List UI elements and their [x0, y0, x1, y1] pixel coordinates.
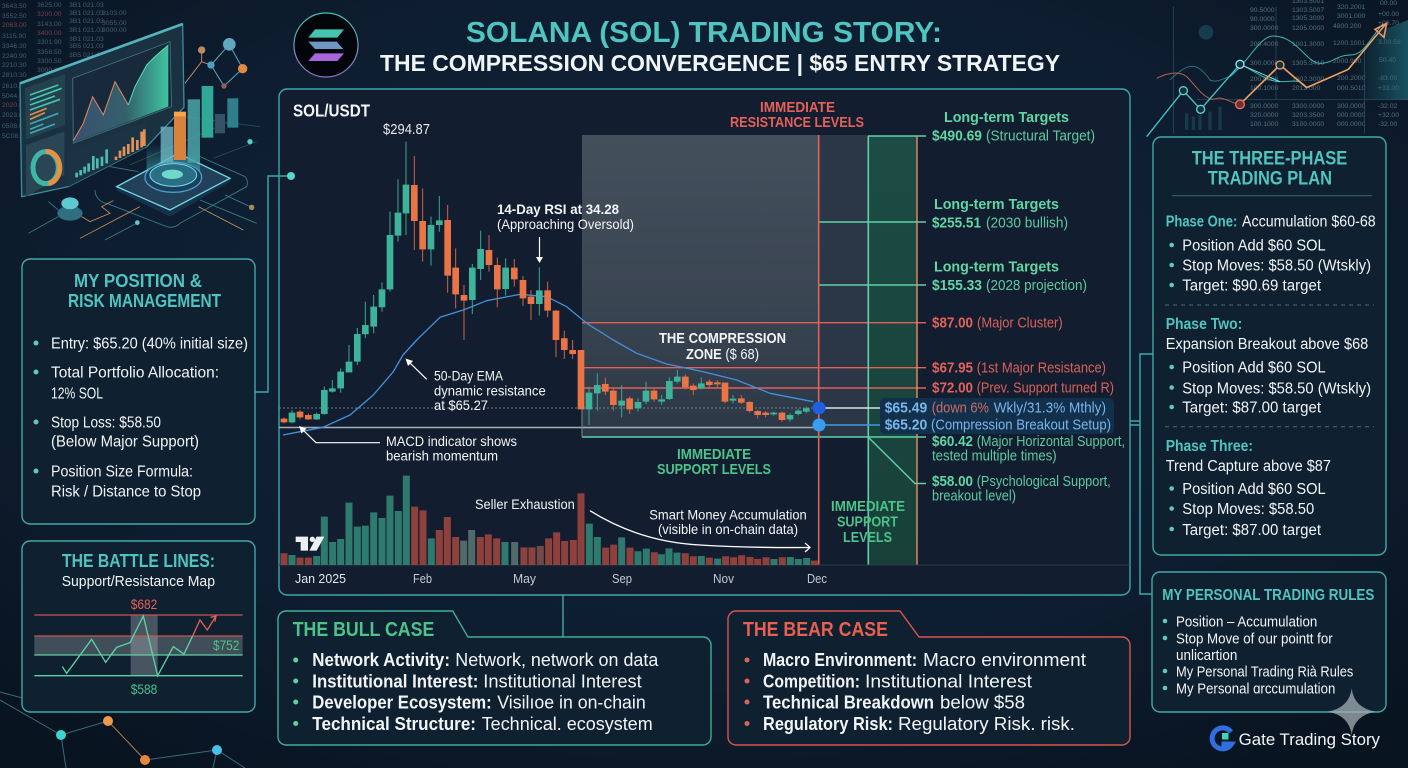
heading: THE THREE-PHASE	[1192, 147, 1347, 169]
long-term target labels: (2028 projection)	[986, 277, 1087, 294]
heading	[1192, 147, 1347, 189]
decorative market numbers, top left: 3300.50	[37, 58, 62, 65]
time axis labels: Sep	[612, 572, 632, 586]
immediate support label, column: LEVELS	[843, 529, 892, 546]
decorative market numbers, top left: 3301.90	[37, 39, 62, 46]
logo: TradingView mark	[296, 537, 324, 551]
decorative market numbers, top left: 3B1 021.03	[69, 18, 104, 25]
panel: the battle lines	[22, 541, 255, 712]
long-term target labels: $155.33	[932, 277, 982, 294]
position list: Entry: $65.20 (40% initial size)	[51, 336, 248, 352]
support level labels	[932, 433, 1125, 505]
decorative market numbers, top left: 5C08.00	[2, 133, 28, 140]
resistance level labels: (Major Cluster)	[977, 315, 1063, 332]
decorative market numbers, top right: +32.00	[1378, 112, 1399, 119]
position list: Total Portfolio Allocation:	[51, 364, 219, 382]
smart money annotation with arrow: (visible in on-chain data)	[658, 521, 798, 537]
decorative market numbers, top left: 3B1 021.03	[69, 2, 104, 9]
phase two	[1166, 316, 1371, 417]
long-term target labels: $255.51	[932, 215, 981, 232]
phase two: Target: $87.00 target	[1182, 400, 1322, 417]
decorative market numbers, top right: 3001.000	[1337, 13, 1366, 20]
panel: the bull case	[278, 611, 711, 745]
decorative market numbers, top left: 3000.00	[37, 67, 62, 74]
phase three: Position Add $60 SOL	[1182, 481, 1326, 498]
decorative market numbers, top left: 2023.00	[2, 112, 27, 119]
position list: Position Size Formula:	[51, 464, 193, 480]
heading: THE BEAR CASE	[743, 619, 888, 641]
current price labels: Wkly/31.3% Mthly)	[994, 399, 1106, 416]
support level labels: (Psychological Support,	[977, 473, 1111, 490]
heading: THE BULL CASE	[293, 619, 434, 641]
decorative market numbers, top left: 2610.00	[2, 83, 27, 90]
decorative market numbers, top right: 000.0000	[1337, 121, 1366, 128]
bull list: Visilıoe in on-chain	[497, 692, 646, 712]
heading: THE BATTLE LINES:	[62, 551, 215, 571]
decorative market numbers, top right: 3100.0000	[1292, 121, 1324, 128]
phase one	[1166, 214, 1376, 295]
bull list: Institutional Interest:	[312, 671, 478, 691]
decorative market numbers, top right: 300.0000	[1250, 103, 1279, 110]
immediate support label, zone: IMMEDIATE	[677, 446, 751, 463]
immediate resistance label: IMMEDIATE	[760, 99, 835, 116]
price labels	[131, 597, 239, 697]
decorative market numbers, top left: 2020.00	[2, 102, 27, 109]
decorative market numbers, top right: +33.00	[1378, 85, 1399, 92]
decorative market numbers, top left: 2210.30	[2, 62, 27, 69]
title	[380, 17, 1060, 76]
decorative market numbers, top right: 200.4000	[1250, 41, 1279, 48]
rules list: Stop Move of our pointt for	[1176, 631, 1333, 647]
time axis labels: Dec	[807, 572, 827, 586]
connector node	[287, 172, 295, 180]
phase three: Trend Capture above $87	[1166, 458, 1331, 475]
decorative market numbers, top left: 3358.50	[37, 49, 62, 56]
decorative market numbers, top right	[1250, 0, 1401, 128]
decorative market numbers, top left: 3B1 021.03	[69, 10, 104, 17]
rules list: My Personal ɑrccumulation	[1176, 681, 1335, 697]
long-term target labels: Long-term Targets	[944, 109, 1069, 126]
phase three: Phase Three:	[1166, 438, 1253, 455]
position list: Stop Loss: $58.50	[51, 414, 161, 432]
time axis labels	[295, 572, 827, 586]
phase one: Phase One:	[1166, 214, 1237, 231]
decorative market numbers, top right: 320.2001	[1337, 4, 1366, 11]
panel: my position and risk management	[22, 259, 255, 524]
seller exhaustion label: Seller Exhaustion	[475, 496, 575, 512]
panel: my personal trading rules	[1152, 572, 1386, 712]
support level labels: (Major Horizontal Support,	[977, 433, 1125, 450]
current price labels: $65.49	[885, 399, 927, 416]
decorative market numbers, top left: 3400.00	[37, 30, 62, 37]
compression zone label	[659, 331, 786, 363]
resistance level labels: (Prev. Support turned R)	[977, 380, 1114, 397]
bear list: below $58	[940, 692, 1025, 712]
decorative market numbers, top right: 3203.3500	[1292, 112, 1324, 119]
decorative market numbers, top left: 3200.00	[37, 11, 62, 18]
MACD annotation with arrow: bearish momentum	[386, 448, 498, 464]
decorative market numbers, top right: -32.00	[1378, 121, 1397, 128]
heading: RISK MANAGEMENT	[68, 290, 222, 311]
smart money annotation with arrow: Smart Money Accumulation	[649, 506, 807, 522]
heading: Support/Resistance Map	[62, 573, 215, 590]
decorative market numbers, top right: 2012.000	[1292, 85, 1321, 92]
position list	[34, 336, 248, 500]
price markers	[812, 402, 826, 432]
time axis labels: Feb	[413, 572, 432, 586]
candlesticks	[284, 142, 806, 425]
decorative market numbers, top left: 3552.50	[2, 13, 27, 20]
bull list: Network Activity:	[312, 650, 450, 670]
RSI annotation	[497, 201, 634, 263]
title: SOLANA (SOL) TRADING STORY:	[466, 17, 942, 49]
high price label: $294.87	[383, 121, 430, 138]
long-term target labels: (Structural Target)	[986, 128, 1095, 145]
MACD annotation with arrow: MACD indicator shows	[386, 433, 517, 449]
phase one: Target: $90.69 target	[1182, 278, 1322, 295]
long-term target labels: Long-term Targets	[934, 196, 1059, 213]
logo: Gate Trading Story	[1212, 728, 1381, 749]
resistance level labels: (1st Major Resistance)	[977, 360, 1106, 377]
decorative market numbers, top left: 2240.90	[2, 53, 27, 60]
decorative market numbers, top left: 2810.30	[2, 72, 27, 79]
decorative market numbers, top right: 200.2000	[1337, 75, 1366, 82]
heading	[62, 551, 215, 590]
rules list: My Personal Trading Rià Rules	[1176, 665, 1353, 681]
immediate support label, column: IMMEDIATE	[831, 498, 905, 515]
EMA annotation with arrow: dynamic resistance	[434, 383, 546, 399]
support level labels: tested multiple times)	[932, 448, 1057, 465]
time axis labels: May	[513, 572, 537, 586]
decorative market numbers, top right: 000.0000	[1337, 112, 1366, 119]
price labels: $752	[213, 638, 239, 653]
decorative market numbers, top right: 100.1000	[1250, 121, 1279, 128]
compression zone label: ZONE ($ 68)	[686, 347, 759, 363]
decorative market numbers, top right: 90.0000	[1250, 16, 1275, 23]
current price labels	[880, 398, 1114, 434]
decorative market numbers, top left: 3B1 021.03	[69, 36, 104, 43]
phase two: Position Add $60 SOL	[1182, 360, 1326, 377]
decorative market numbers, top left: 3643.50	[2, 3, 27, 10]
support level labels: $58.00	[932, 473, 973, 490]
decorative market numbers, top left: 3143.00	[37, 21, 62, 28]
phase one: Position Add $60 SOL	[1182, 238, 1326, 255]
bull list	[293, 650, 659, 734]
bear list: Regulatory Risk. risk.	[898, 714, 1075, 734]
decorative market numbers, top right: 90.5000	[1250, 7, 1275, 14]
phase two: Phase Two:	[1166, 316, 1242, 333]
RSI annotation: (Approaching Oversold)	[497, 216, 634, 232]
support resistance mini chart	[34, 615, 243, 676]
bull list: Technical Structure:	[312, 714, 476, 734]
decorative market numbers, top right: 3300.0000	[1292, 103, 1324, 110]
decorative market numbers, top right: 1001.3000	[1292, 41, 1324, 48]
decorative market numbers, top right: -83.00	[1378, 75, 1397, 82]
decorative market numbers, top right: 1302.3000	[1292, 76, 1324, 83]
title: THE COMPRESSION CONVERGENCE | $65 ENTRY STRATEGY	[380, 50, 1060, 76]
support level labels: breakout level)	[932, 488, 1016, 505]
decorative market numbers, top right: 300.0000	[1250, 60, 1279, 67]
illustration: trading dashboard monitor and holographic platform	[20, 24, 260, 240]
decorative market numbers, top right: 00.00	[1380, 0, 1397, 7]
phase one: Stop Moves: $58.50 (Wtskly)	[1182, 258, 1371, 275]
current price labels: (Compression Breakout Setup)	[931, 416, 1111, 433]
phase one: Accumulation $60-68	[1242, 214, 1376, 231]
decorative market numbers, top left: 3346.30	[2, 43, 27, 50]
long-term target labels: Long-term Targets	[934, 259, 1059, 276]
decorative market numbers, top left: 2063.00	[2, 22, 27, 29]
panel: the bear case	[728, 611, 1130, 745]
decorative market numbers, top left: 0508.00	[2, 123, 27, 130]
icon: sparkle	[1328, 688, 1376, 735]
time axis labels: Nov	[713, 572, 735, 586]
logo: Gate Trading Story: Gate Trading Story	[1239, 731, 1381, 749]
decorative market numbers, top left: 5044.00	[2, 93, 27, 100]
decorative market numbers, top right: 4800.200	[1333, 23, 1362, 30]
bear list: Technical Breakdown	[763, 692, 934, 712]
heading	[68, 270, 222, 311]
decorative market numbers, top right: 3.00.59	[1378, 39, 1401, 46]
long-term target labels: (2030 bullish)	[986, 215, 1068, 232]
phase three: Stop Moves: $58.50	[1182, 501, 1315, 518]
immediate support label, zone: SUPPORT LEVELS	[657, 461, 771, 478]
volume bars	[284, 476, 814, 565]
decorative market numbers, top right: 320.0000	[1250, 112, 1279, 119]
bear list: Regulatory Risk:	[763, 714, 893, 734]
decorative market numbers, top right: 1305.3410	[1292, 60, 1324, 67]
compression zone shading	[582, 135, 917, 565]
decorative market numbers, top right: 000.5010	[1337, 85, 1366, 92]
decorative market numbers, top right: -32.02	[1378, 103, 1397, 110]
EMA annotation with arrow: at $65.27	[434, 397, 488, 413]
chart heading: SOL/USDT	[293, 101, 370, 121]
bull list: Network, network on data	[455, 650, 659, 670]
MACD annotation with arrow	[299, 426, 517, 464]
resistance level labels: $87.00	[932, 315, 973, 332]
EMA annotation with arrow	[406, 358, 546, 413]
long-term target labels: $490.69	[932, 128, 982, 145]
decorative market numbers, top right: 300.0000	[1337, 103, 1366, 110]
decorative market numbers, top right: 100.1000	[1250, 85, 1279, 92]
decorative market numbers, top right: 1305.3000	[1292, 15, 1324, 22]
rules list	[1163, 615, 1353, 697]
long-term target labels	[932, 109, 1095, 294]
immediate resistance label: RESISTANCE LEVELS	[730, 114, 864, 131]
bear list: Institutional Interest	[865, 671, 1032, 691]
decorative market numbers, top right: 1205.0000	[1292, 25, 1324, 32]
resistance level labels	[932, 315, 1114, 397]
resistance level labels: $72.00	[932, 380, 973, 397]
decorative market numbers, top right: +00.70	[1378, 20, 1399, 27]
bull list: Technical. ecosystem	[482, 714, 653, 734]
current price labels: $65.20	[885, 416, 927, 433]
logo: Solana	[294, 13, 358, 77]
decorative market numbers, top left: 3055.00	[102, 20, 127, 27]
phase two: Expansion Breakout above $68	[1166, 336, 1368, 353]
decorative market numbers, top left: 3B5 021.03	[69, 52, 104, 59]
connector lines between panels	[255, 176, 1153, 637]
EMA annotation with arrow: 50-Day EMA	[434, 368, 504, 384]
immediate resistance label	[730, 99, 864, 131]
50-day EMA line	[283, 294, 813, 435]
decorative market numbers, top right: 200.0000	[1250, 76, 1279, 83]
illustration: rising multi-line chart, top right	[1147, 7, 1408, 137]
decorative market numbers, top left: 3B1 021.03	[69, 27, 104, 34]
compression zone label: THE COMPRESSION	[659, 331, 786, 347]
position list: (Below Major Support)	[51, 434, 199, 450]
rules list: unlicartion	[1176, 648, 1237, 664]
decorative market numbers, top left: 3103.00	[102, 10, 127, 17]
price labels: $588	[131, 682, 157, 697]
bear list: Macro Environment:	[763, 650, 917, 670]
support level labels: $60.42	[932, 433, 973, 450]
price labels: $682	[131, 597, 157, 612]
phase three	[1166, 438, 1331, 539]
RSI annotation: 14-Day RSI at 34.28	[497, 201, 619, 217]
decorative market numbers, top right: 2000.900	[1333, 58, 1362, 65]
heading: MY POSITION &	[74, 270, 202, 291]
immediate support label, column	[831, 498, 905, 546]
decorative network nodes, bottom left	[0, 692, 245, 768]
heading: MY PERSONAL TRADING RULES	[1162, 587, 1374, 604]
smart money annotation with arrow	[590, 506, 810, 552]
panel: SOL/USDT chart	[279, 89, 1130, 595]
bear list: Competition:	[763, 671, 860, 691]
bull list: Institutional Interest	[483, 671, 642, 691]
time axis labels: Jan 2025	[295, 572, 346, 586]
phase three: Target: $87.00 target	[1182, 522, 1322, 539]
bull list: Developer Ecosystem:	[312, 692, 492, 712]
decorative market numbers, top right: +00.00	[1378, 11, 1399, 18]
decorative market numbers, top right: 50.40	[1379, 57, 1396, 64]
position list: 12% SOL	[51, 386, 103, 402]
immediate support label, zone	[657, 446, 771, 478]
position list: Risk / Distance to Stop	[51, 484, 201, 500]
decorative market numbers, top left: 3625.00	[37, 2, 62, 9]
phase two: Stop Moves: $58.50 (Wtskly)	[1182, 380, 1371, 397]
immediate support label, column: SUPPORT	[837, 514, 898, 531]
bear list	[744, 650, 1086, 734]
resistance level labels: $67.95	[932, 360, 973, 377]
heading: TRADING PLAN	[1208, 167, 1332, 189]
decorative market numbers, top right: 300.0000	[1250, 25, 1279, 32]
current price labels: (down 6%	[932, 399, 989, 416]
bear list: Macro environment	[923, 650, 1086, 670]
decorative market numbers, top right: 1200.1001	[1333, 40, 1365, 47]
decorative market numbers, top right: 1303.5007	[1292, 7, 1324, 14]
decorative market numbers, top left: 3000.00	[102, 27, 127, 34]
decorative market numbers, top left: 3B5 021.03	[69, 43, 104, 50]
decorative market numbers, top left: 3115.90	[2, 33, 26, 40]
panel: the three-phase trading plan	[1153, 137, 1386, 555]
rules list: Position – Accumulation	[1176, 615, 1317, 631]
level lines	[279, 135, 1130, 565]
decorative market numbers, top left	[2, 2, 127, 140]
